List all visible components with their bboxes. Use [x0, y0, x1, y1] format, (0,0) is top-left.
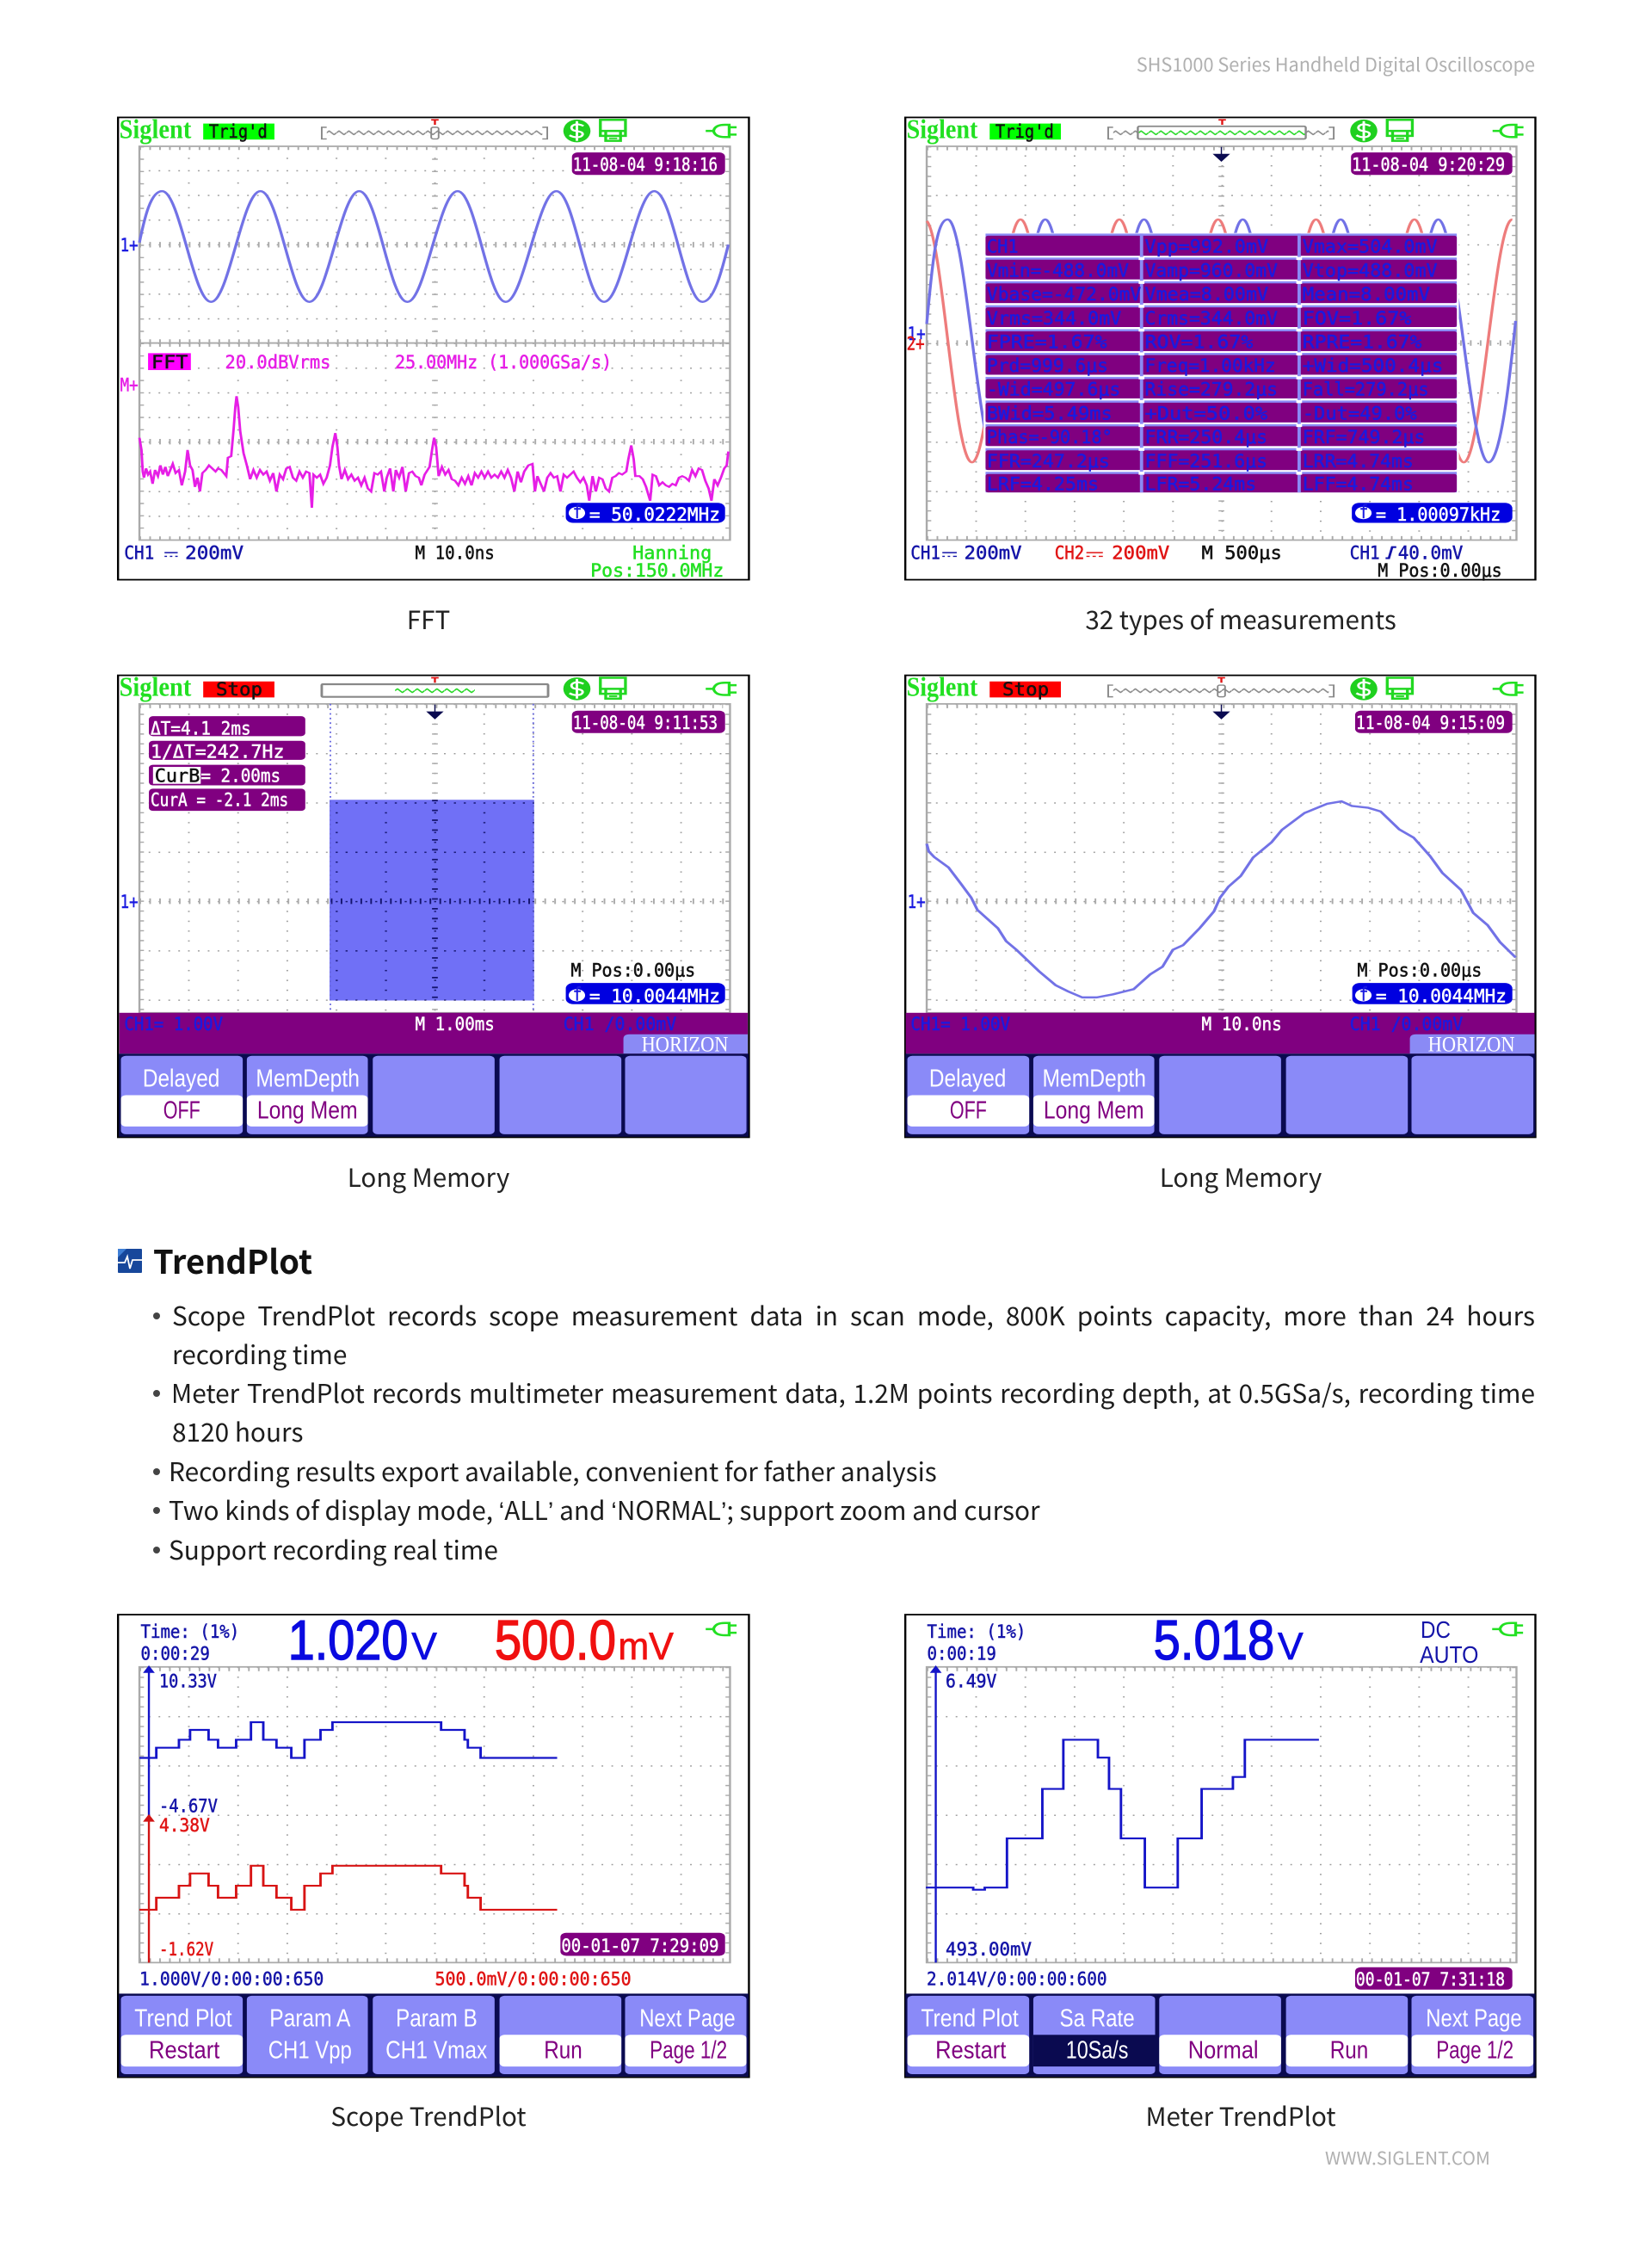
caption: Meter TrendPlot: Meter TrendPlot [1145, 2097, 1336, 2134]
frequency readout: f [1359, 501, 1368, 522]
trigger position arrow [428, 705, 442, 719]
measurement table: Vrms=344.0mV [987, 306, 1121, 329]
soft-key menu: MemDepth [256, 1065, 360, 1092]
bottom readouts: Hanning [632, 541, 712, 563]
cursor readouts: ΔT=4.1 2ms [151, 717, 251, 739]
status bar: Siglent [120, 672, 192, 702]
axis labels: -1.62V [159, 1938, 213, 1960]
grid [927, 1667, 1516, 1962]
measurement table: Freq=1.00kHz [1145, 355, 1276, 376]
grid [927, 704, 1516, 1013]
bottom readouts [124, 541, 724, 581]
reading A: V [411, 1626, 437, 1668]
soft-key menu: OFF [163, 1096, 200, 1124]
elapsed time: 0:00:29 [140, 1642, 210, 1665]
soft-key menu: Long Mem [1044, 1096, 1144, 1124]
frequency readout [566, 983, 725, 1006]
measurement table: LRR=4.74ms [1303, 450, 1414, 472]
channel markers [120, 234, 139, 396]
cursor values: 1.000V/0:00:00:650 [139, 1967, 324, 1990]
soft-key menu: Param B [396, 2004, 478, 2032]
caption: Long Memory left: Long Memory [348, 1158, 509, 1195]
cursor readouts [149, 716, 305, 811]
trigger position arrow [1214, 147, 1229, 161]
cursor value: 2.014V/0:00:00:600 [927, 1967, 1107, 1990]
channel markers: M+ [120, 374, 139, 396]
position readout: M Pos:0.00μs [570, 959, 695, 981]
bottom readouts: 200mV [1112, 541, 1169, 563]
channel markers: 2+ [907, 332, 925, 355]
status bar [120, 672, 737, 702]
frequency readout [566, 501, 725, 525]
measurement table: Vmax=504.0mV [1303, 235, 1438, 257]
FFT trace [139, 396, 729, 508]
measurement table: FOV=1.67% [1303, 306, 1412, 329]
measurement table: Fall=279.2μs [1303, 378, 1429, 400]
measurement table: FFF=251.6μs [1145, 450, 1267, 472]
elapsed time [928, 1621, 1026, 1665]
FFT labels [148, 351, 612, 373]
channel 1 trace [927, 801, 1516, 997]
axis [932, 1667, 940, 1962]
bullet: Scope TrendPlot: recording time [172, 1334, 347, 1372]
measurement table: Vpp=992.0mV [1145, 235, 1268, 257]
elapsed time: Time: (1%) [140, 1621, 239, 1642]
channel marker: 1+ [908, 891, 926, 912]
purple readout band: CH1 /0.00mV [564, 1013, 676, 1035]
FFT labels: 25.00MHz (1.000GSa/s) [395, 351, 612, 373]
cursor values: 500.0mV/0:00:00:650 [435, 1967, 632, 1990]
frequency readout: f [573, 983, 582, 1005]
panel: FFT screen [117, 114, 750, 581]
soft-key menu: Delayed [143, 1065, 219, 1092]
measurement table: FRF=749.2μs [1303, 426, 1425, 448]
status bar [907, 114, 1524, 145]
soft-key menu: Normal [1188, 2036, 1259, 2064]
cursor readouts: CurB [155, 764, 200, 787]
purple readout band: CH1= 1.00V [124, 1013, 223, 1035]
purple readout band: M 10.0ns [1202, 1013, 1282, 1035]
measurement table: Phas=-90.18° [987, 426, 1113, 448]
measurement table: ROV=1.67% [1145, 330, 1253, 353]
soft-key menu: Restart [149, 2036, 220, 2064]
measurement table: +Wid=500.4μs [1303, 355, 1443, 376]
axis labels [946, 1670, 1032, 1960]
axis labels: 4.38V [159, 1814, 210, 1836]
panel: Meter TrendPlot screen [903, 1609, 1537, 2078]
cursors [330, 704, 533, 1013]
channel 1 sine trace [139, 191, 729, 302]
measurement table: Vmin=-488.0mV [987, 259, 1129, 281]
icon: power plug [1492, 1623, 1523, 1635]
purple readout band [906, 1013, 1535, 1056]
measurement table: -Wid=497.6μs [987, 378, 1120, 400]
measurement table: +Dut=50.0% [1145, 402, 1267, 424]
cursor values [139, 1967, 632, 1990]
caption: Scope TrendPlot: Scope TrendPlot [330, 2097, 527, 2134]
soft-key menu: Long Mem [257, 1096, 358, 1124]
channel markers: 1+ [120, 234, 139, 256]
measurement table: FPRE=1.67% [987, 330, 1107, 353]
channel traces [927, 219, 1516, 462]
measurement table: Vmea=8.00mV [1145, 283, 1268, 305]
elapsed time [140, 1621, 239, 1665]
header text: SHS1000 Series Handheld Digital Oscilloscope [1137, 51, 1535, 77]
axis labels [159, 1670, 218, 1960]
bottom readouts: CH1 [910, 541, 940, 563]
bullet: Meter TrendPlot [153, 1373, 1535, 1449]
measurement table: LFR=5.24ms [1145, 472, 1256, 495]
bullet: real time: Support recording real time [169, 1529, 498, 1567]
measurement table: BWid=5.49ms [987, 402, 1113, 424]
elapsed time: Time: (1%) [928, 1621, 1026, 1642]
bullet: display mode: Two kinds of display mode, ‘ALL’ and ‘NORMAL’; support zoom and cursor [169, 1490, 1040, 1528]
measurement table: Prd=999.6μs [987, 355, 1108, 376]
bullet: Scope TrendPlot: Scope TrendPlot records scope measurement data in scan mode, 800K points capacity, more than 24 hours [172, 1295, 1535, 1333]
measurement table: CH1 [987, 235, 1019, 257]
caption: 32 types of measurements: 32 types of measurements [1085, 600, 1396, 637]
footer: website: WWW.SIGLENT.COM [1325, 2144, 1490, 2170]
status bar: Siglent [907, 114, 978, 145]
bottom readouts: M 10.0ns [416, 541, 495, 563]
measurement table: Mean=8.00mV [1303, 283, 1430, 305]
FFT labels: 20.0dBVrms [225, 351, 330, 373]
reading A: 1.020 [288, 1609, 408, 1671]
panel: Scope TrendPlot screen [117, 1609, 750, 2078]
channel markers [907, 323, 926, 355]
soft-key menu [905, 1053, 1535, 1137]
measurement table: Rise=279.2μs [1145, 378, 1278, 400]
grid [927, 146, 1516, 540]
soft-key menu: Trend Plot [921, 2004, 1019, 2032]
bullet: Meter TrendPlot: Meter TrendPlot records multimeter measurement data, 1.2M points recording depth, at 0.5GSa/s, recording time [171, 1373, 1535, 1411]
coupling and mode: DC [1421, 1615, 1451, 1643]
cursor readouts: = 2.00ms [200, 764, 280, 787]
purple readout band: M 1.00ms [416, 1013, 495, 1035]
measurement table: FRR=250.4μs [1145, 426, 1267, 448]
bullet: Scope TrendPlot [153, 1295, 1535, 1372]
measurement table: FFR=247.2μs [987, 450, 1110, 472]
icon: TrendPlot heading pulse [118, 1249, 142, 1273]
reading B: 500.0 [495, 1609, 616, 1671]
grid [139, 146, 730, 540]
elapsed time: 0:00:19 [928, 1642, 996, 1665]
sampled signal block [330, 800, 534, 1000]
frequency readout [1352, 501, 1513, 525]
axis labels: 6.49V [946, 1670, 996, 1692]
channel markers: 1+ [908, 323, 926, 344]
reading: V [1278, 1626, 1304, 1668]
panel: 32 measurements screen [903, 114, 1537, 581]
axis labels: 493.00mV [946, 1938, 1032, 1960]
heading: TrendPlot: TrendPlot [153, 1236, 312, 1283]
status bar: Trig'd [209, 120, 268, 142]
soft-key menu: 10Sa/s [1066, 2036, 1128, 2064]
soft-key menu: Restart [935, 2036, 1007, 2064]
bottom readouts [910, 541, 1502, 581]
bottom readouts: CH2 [1055, 541, 1084, 563]
coupling and mode [1420, 1615, 1478, 1668]
red trend trace [139, 1866, 558, 1910]
purple readout band: CH1 /0.00mV [1350, 1013, 1463, 1035]
cursor readouts: 1/ΔT=242.7Hz [151, 740, 284, 763]
channel marker: 1+ [120, 891, 139, 912]
status bar [907, 672, 1524, 702]
panel: Long Memory screen with square wave [117, 672, 750, 1138]
axis labels: -4.67V [159, 1794, 218, 1816]
measurement table [983, 233, 1459, 495]
status bar: Siglent [120, 114, 192, 145]
axes [145, 1667, 153, 1962]
soft-key menu: Run [544, 2036, 583, 2064]
frequency readout: f [1359, 983, 1368, 1005]
caption: Long Memory right: Long Memory [1160, 1158, 1322, 1195]
FFT labels: FFT [151, 351, 188, 373]
bullet: Meter TrendPlot: 8120 hours [172, 1411, 303, 1449]
frequency readout: f [573, 501, 582, 522]
grid [139, 1667, 730, 1962]
purple readout band [120, 1013, 748, 1056]
soft-key menu [119, 1053, 749, 1137]
soft-key menu: Trend Plot [134, 2004, 232, 2032]
measurement table: LRF=4.25ms [987, 472, 1099, 495]
coupling and mode: AUTO [1420, 1641, 1478, 1668]
panel: Long Memory screen with sine wave [903, 672, 1537, 1138]
status bar: Siglent [907, 672, 978, 702]
soft-key menu: Param A [269, 2004, 351, 2032]
position readout: M Pos:0.00μs [1357, 959, 1482, 981]
reading: 5.018 [1154, 1609, 1274, 1671]
soft-key menu: Run [1330, 2036, 1368, 2064]
soft-key menu: Sa Rate [1060, 2004, 1135, 2032]
caption: FFT: FFT [407, 600, 450, 637]
bottom readouts: 40.0mV [1398, 541, 1463, 563]
status bar: Stop [216, 678, 262, 700]
bottom readouts: CH1 [124, 541, 154, 563]
reading B: mV [618, 1626, 674, 1668]
bottom readouts: M 500μs [1202, 541, 1282, 563]
soft-key menu: CH1 Vpp [268, 2036, 352, 2064]
measurement table: Crms=344.0mV [1145, 306, 1278, 329]
axis labels: 10.33V [159, 1670, 217, 1692]
purple readout band: CH1= 1.00V [910, 1013, 1010, 1035]
measurement table: RPRE=1.67% [1303, 330, 1421, 353]
bottom readouts: 200mV [965, 541, 1022, 563]
bottom readouts: 200mV [185, 541, 243, 563]
soft-key menu: OFF [950, 1096, 987, 1124]
soft-key menu: MemDepth [1042, 1065, 1146, 1092]
status bar [120, 114, 737, 145]
measurement table: -Dut=49.0% [1303, 402, 1417, 424]
bullet: export: Recording results export available, convenient for father analysis [169, 1451, 937, 1489]
status bar: Trig'd [996, 120, 1054, 142]
soft-key menu: CH1 Vmax [385, 2036, 487, 2064]
blue trend trace [139, 1722, 558, 1757]
measurement table: Vamp=960.0mV [1145, 259, 1278, 281]
measurement table: Vtop=488.0mV [1303, 259, 1438, 281]
status bar: Stop [1002, 678, 1049, 700]
cursor readouts: CurA = -2.1 2ms [151, 788, 288, 811]
measurement table: Vbase=-472.0mV [987, 283, 1141, 305]
trigger position arrow [1214, 705, 1229, 719]
icon: power plug [706, 1623, 737, 1635]
frequency readout [1353, 983, 1513, 1006]
bottom readouts: CH1 [1350, 541, 1380, 563]
grid [139, 704, 730, 1013]
soft-key menu: Delayed [929, 1065, 1006, 1092]
meter trend trace [926, 1739, 1319, 1890]
soft-key menu [119, 1993, 749, 2077]
measurement table: LFF=4.74ms [1303, 472, 1414, 495]
soft-key menu [905, 1993, 1535, 2077]
